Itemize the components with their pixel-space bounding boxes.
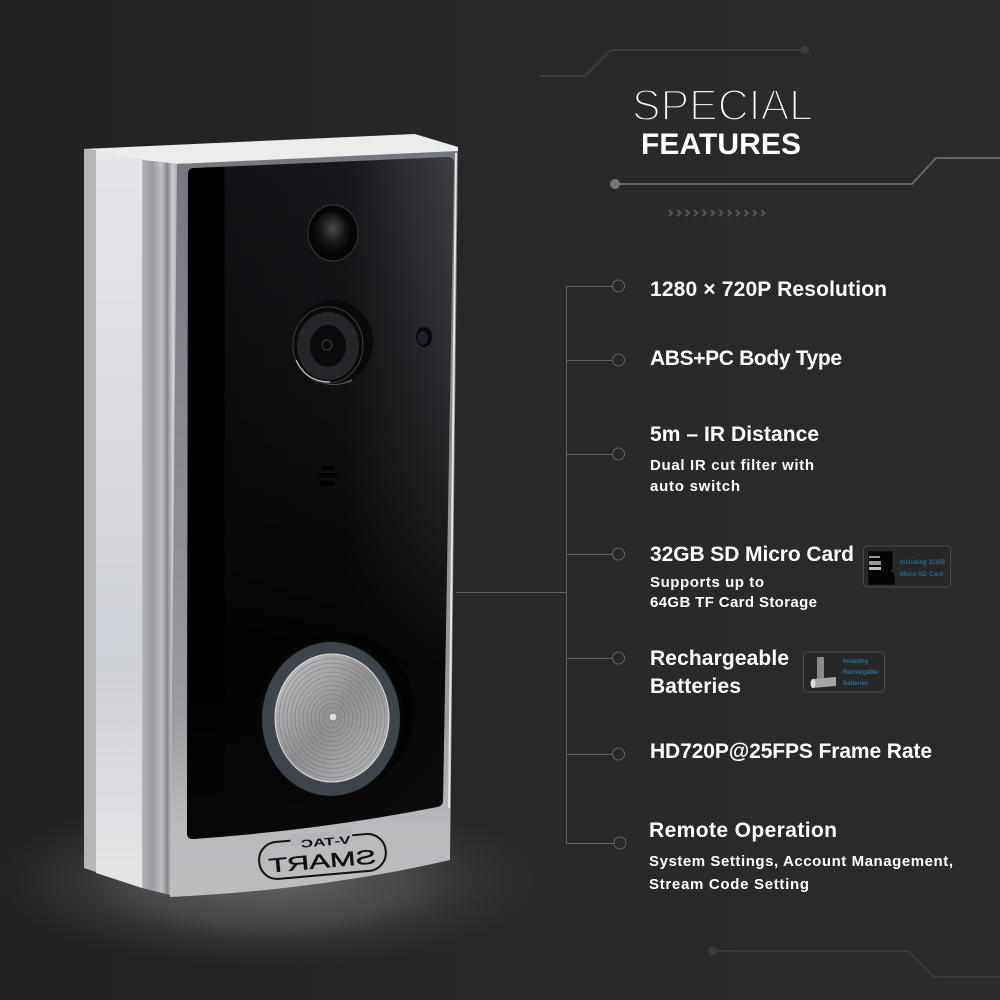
feature: remote operation: Remote Operation <box>649 819 837 842</box>
chevron row <box>669 210 764 216</box>
battery badge: Batteries <box>843 681 868 687</box>
camera lens <box>293 300 373 384</box>
SD card badge: Including 32GB <box>900 560 945 566</box>
device side <box>84 149 178 897</box>
feature: frame rate: HD720P@25FPS Frame Rate <box>650 740 932 763</box>
feature: IR distance: 5m – IR Distance <box>650 423 819 446</box>
SD card badge: Micro SD Card <box>900 572 943 578</box>
doorbell button <box>259 632 414 799</box>
feature: batteries <box>650 647 789 698</box>
feature: body type: ABS+PC Body Type <box>650 347 842 370</box>
title <box>632 82 813 161</box>
mirrored V-TAC SMART logo <box>257 827 387 880</box>
battery badge: Rechargable <box>843 670 879 676</box>
decorative circuit line: top <box>540 46 809 76</box>
device top face <box>84 134 458 164</box>
feature: remote operation: Stream Code Setting <box>649 876 809 893</box>
icon: micro SD card <box>868 551 895 585</box>
mirrored V-TAC SMART logo: V-TAC <box>300 834 351 851</box>
feature: SD card: 64GB TF Card Storage <box>650 594 817 611</box>
decorative circuit line: below heading <box>610 158 1000 189</box>
mirrored V-TAC SMART logo: SMART <box>268 846 377 878</box>
feature: SD card <box>650 543 854 611</box>
feature: IR distance: auto switch <box>650 478 740 495</box>
doorbell product <box>84 134 458 897</box>
feature: batteries: Batteries <box>650 675 741 698</box>
feature: IR distance: Dual IR cut filter with <box>650 457 814 474</box>
floor glow under the device <box>0 790 560 970</box>
feature: IR distance <box>650 423 819 495</box>
motion sensor <box>308 205 358 261</box>
connector lines <box>456 280 626 849</box>
battery badge <box>804 652 884 692</box>
feature: remote operation <box>649 819 953 893</box>
decorative circuit line: bottom <box>708 946 1000 977</box>
title line: features: FEATURES <box>641 128 801 161</box>
feature: SD card: 32GB SD Micro Card <box>650 543 854 566</box>
black glass panel <box>187 157 454 839</box>
status LED <box>416 327 432 347</box>
icon: batteries <box>810 657 836 688</box>
feature: SD card: Supports up to <box>650 574 764 591</box>
device front frame <box>170 151 458 897</box>
title line: special: SPECIAL <box>632 82 813 130</box>
SD card badge <box>864 546 950 587</box>
feature: resolution: 1280 × 720P Resolution <box>650 278 887 301</box>
feature: batteries: Rechargeable <box>650 647 789 670</box>
feature: remote operation: System Settings, Account Management, <box>649 853 953 870</box>
battery badge: Including <box>843 659 868 665</box>
speaker grille <box>319 466 337 486</box>
frame right highlight <box>449 153 456 808</box>
